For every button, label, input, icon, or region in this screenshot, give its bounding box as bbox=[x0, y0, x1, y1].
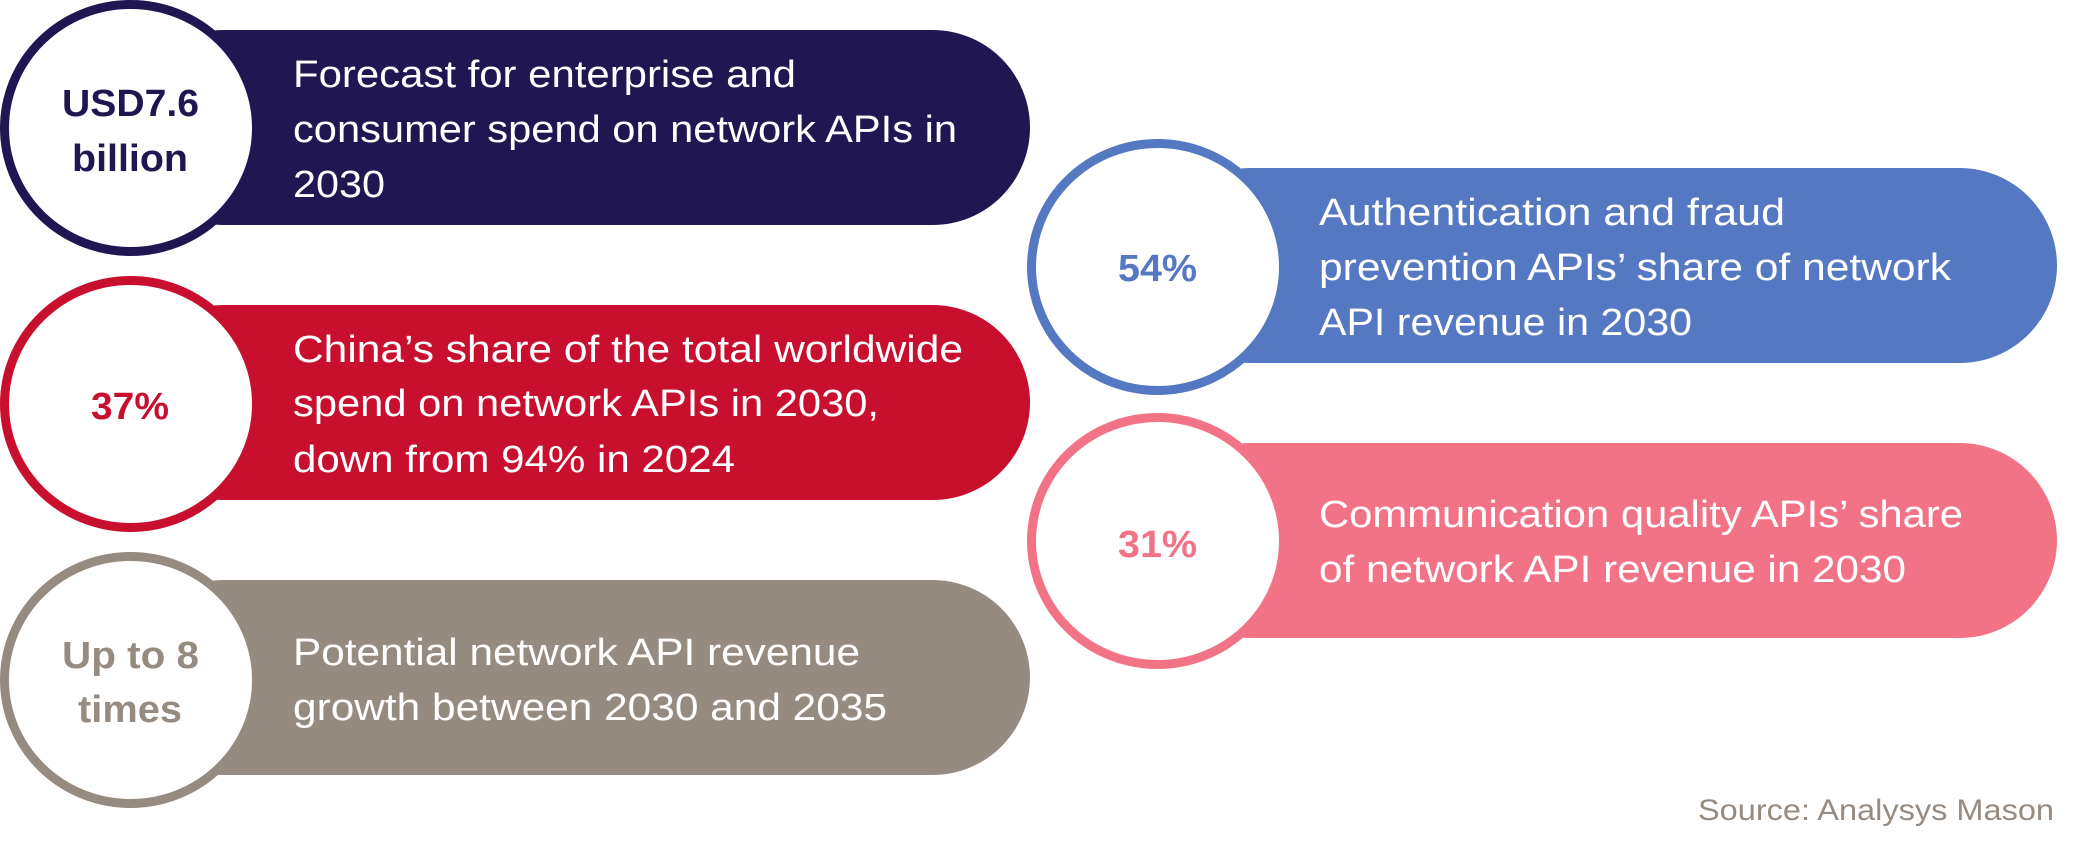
stat: up to 8 times: times bbox=[78, 689, 182, 731]
pill background: grey bbox=[126, 580, 1030, 775]
description: growth: Potential network API revenue bbox=[293, 632, 860, 674]
panel: communication quality 31% bbox=[1032, 418, 2057, 664]
description: forecast: 2030 bbox=[293, 164, 385, 206]
stat: 54%: 54% bbox=[1118, 248, 1197, 290]
stat: 31%: 31% bbox=[1118, 524, 1197, 566]
stat: USD7.6 billion bbox=[62, 83, 199, 180]
panel: authentication 54% bbox=[1032, 144, 2057, 390]
description: forecast: consumer spend on network APIs in bbox=[293, 109, 957, 151]
pill background: red bbox=[126, 305, 1030, 500]
description: forecast: Forecast for enterprise and bbox=[293, 54, 796, 96]
description: authentication: API revenue in 2030 bbox=[1319, 302, 1692, 344]
description: growth bbox=[293, 632, 887, 729]
circle badge: USD7.6 billion bbox=[4, 4, 256, 252]
description: authentication: Authentication and fraud bbox=[1319, 192, 1785, 234]
stat: 37%: 37% bbox=[91, 386, 169, 428]
circle badge: 54% bbox=[1032, 144, 1284, 390]
description: authentication bbox=[1319, 192, 1952, 344]
circle badge: 37% bbox=[4, 280, 256, 528]
description: China share: down from 94% in 2024 bbox=[293, 439, 735, 481]
panel: up to 8 times bbox=[4, 556, 1030, 804]
pill background: blue bbox=[1153, 168, 2057, 363]
stat: USD7.6 billion: USD7.6 bbox=[62, 83, 199, 125]
description: communication quality bbox=[1319, 494, 1963, 591]
circle badge: up to 8 times bbox=[4, 556, 256, 804]
stat: up to 8 times bbox=[62, 635, 199, 731]
description: authentication: prevention APIs’ share of network bbox=[1319, 247, 1952, 289]
description: China share: China’s share of the total worldwide bbox=[293, 329, 963, 371]
description: communication quality: of network API revenue in 2030 bbox=[1319, 549, 1906, 591]
description: China share bbox=[293, 329, 963, 481]
description: communication quality: Communication quality APIs’ share bbox=[1319, 494, 1963, 536]
stat: up to 8 times: Up to 8 bbox=[62, 635, 199, 677]
stat: USD7.6 billion: billion bbox=[72, 138, 188, 180]
circle badge: 31% bbox=[1032, 418, 1284, 664]
panel: China share 37% bbox=[4, 280, 1030, 528]
panel: USD7.6 billion forecast bbox=[4, 4, 1030, 252]
source note: Source: Analysys Mason bbox=[1698, 794, 2054, 827]
pill background: navy bbox=[126, 30, 1030, 225]
description: growth: growth between 2030 and 2035 bbox=[293, 687, 887, 729]
description: China share: spend on network APIs in 2030, bbox=[293, 383, 879, 425]
pill background: pink bbox=[1153, 443, 2057, 638]
description: forecast bbox=[293, 54, 957, 206]
